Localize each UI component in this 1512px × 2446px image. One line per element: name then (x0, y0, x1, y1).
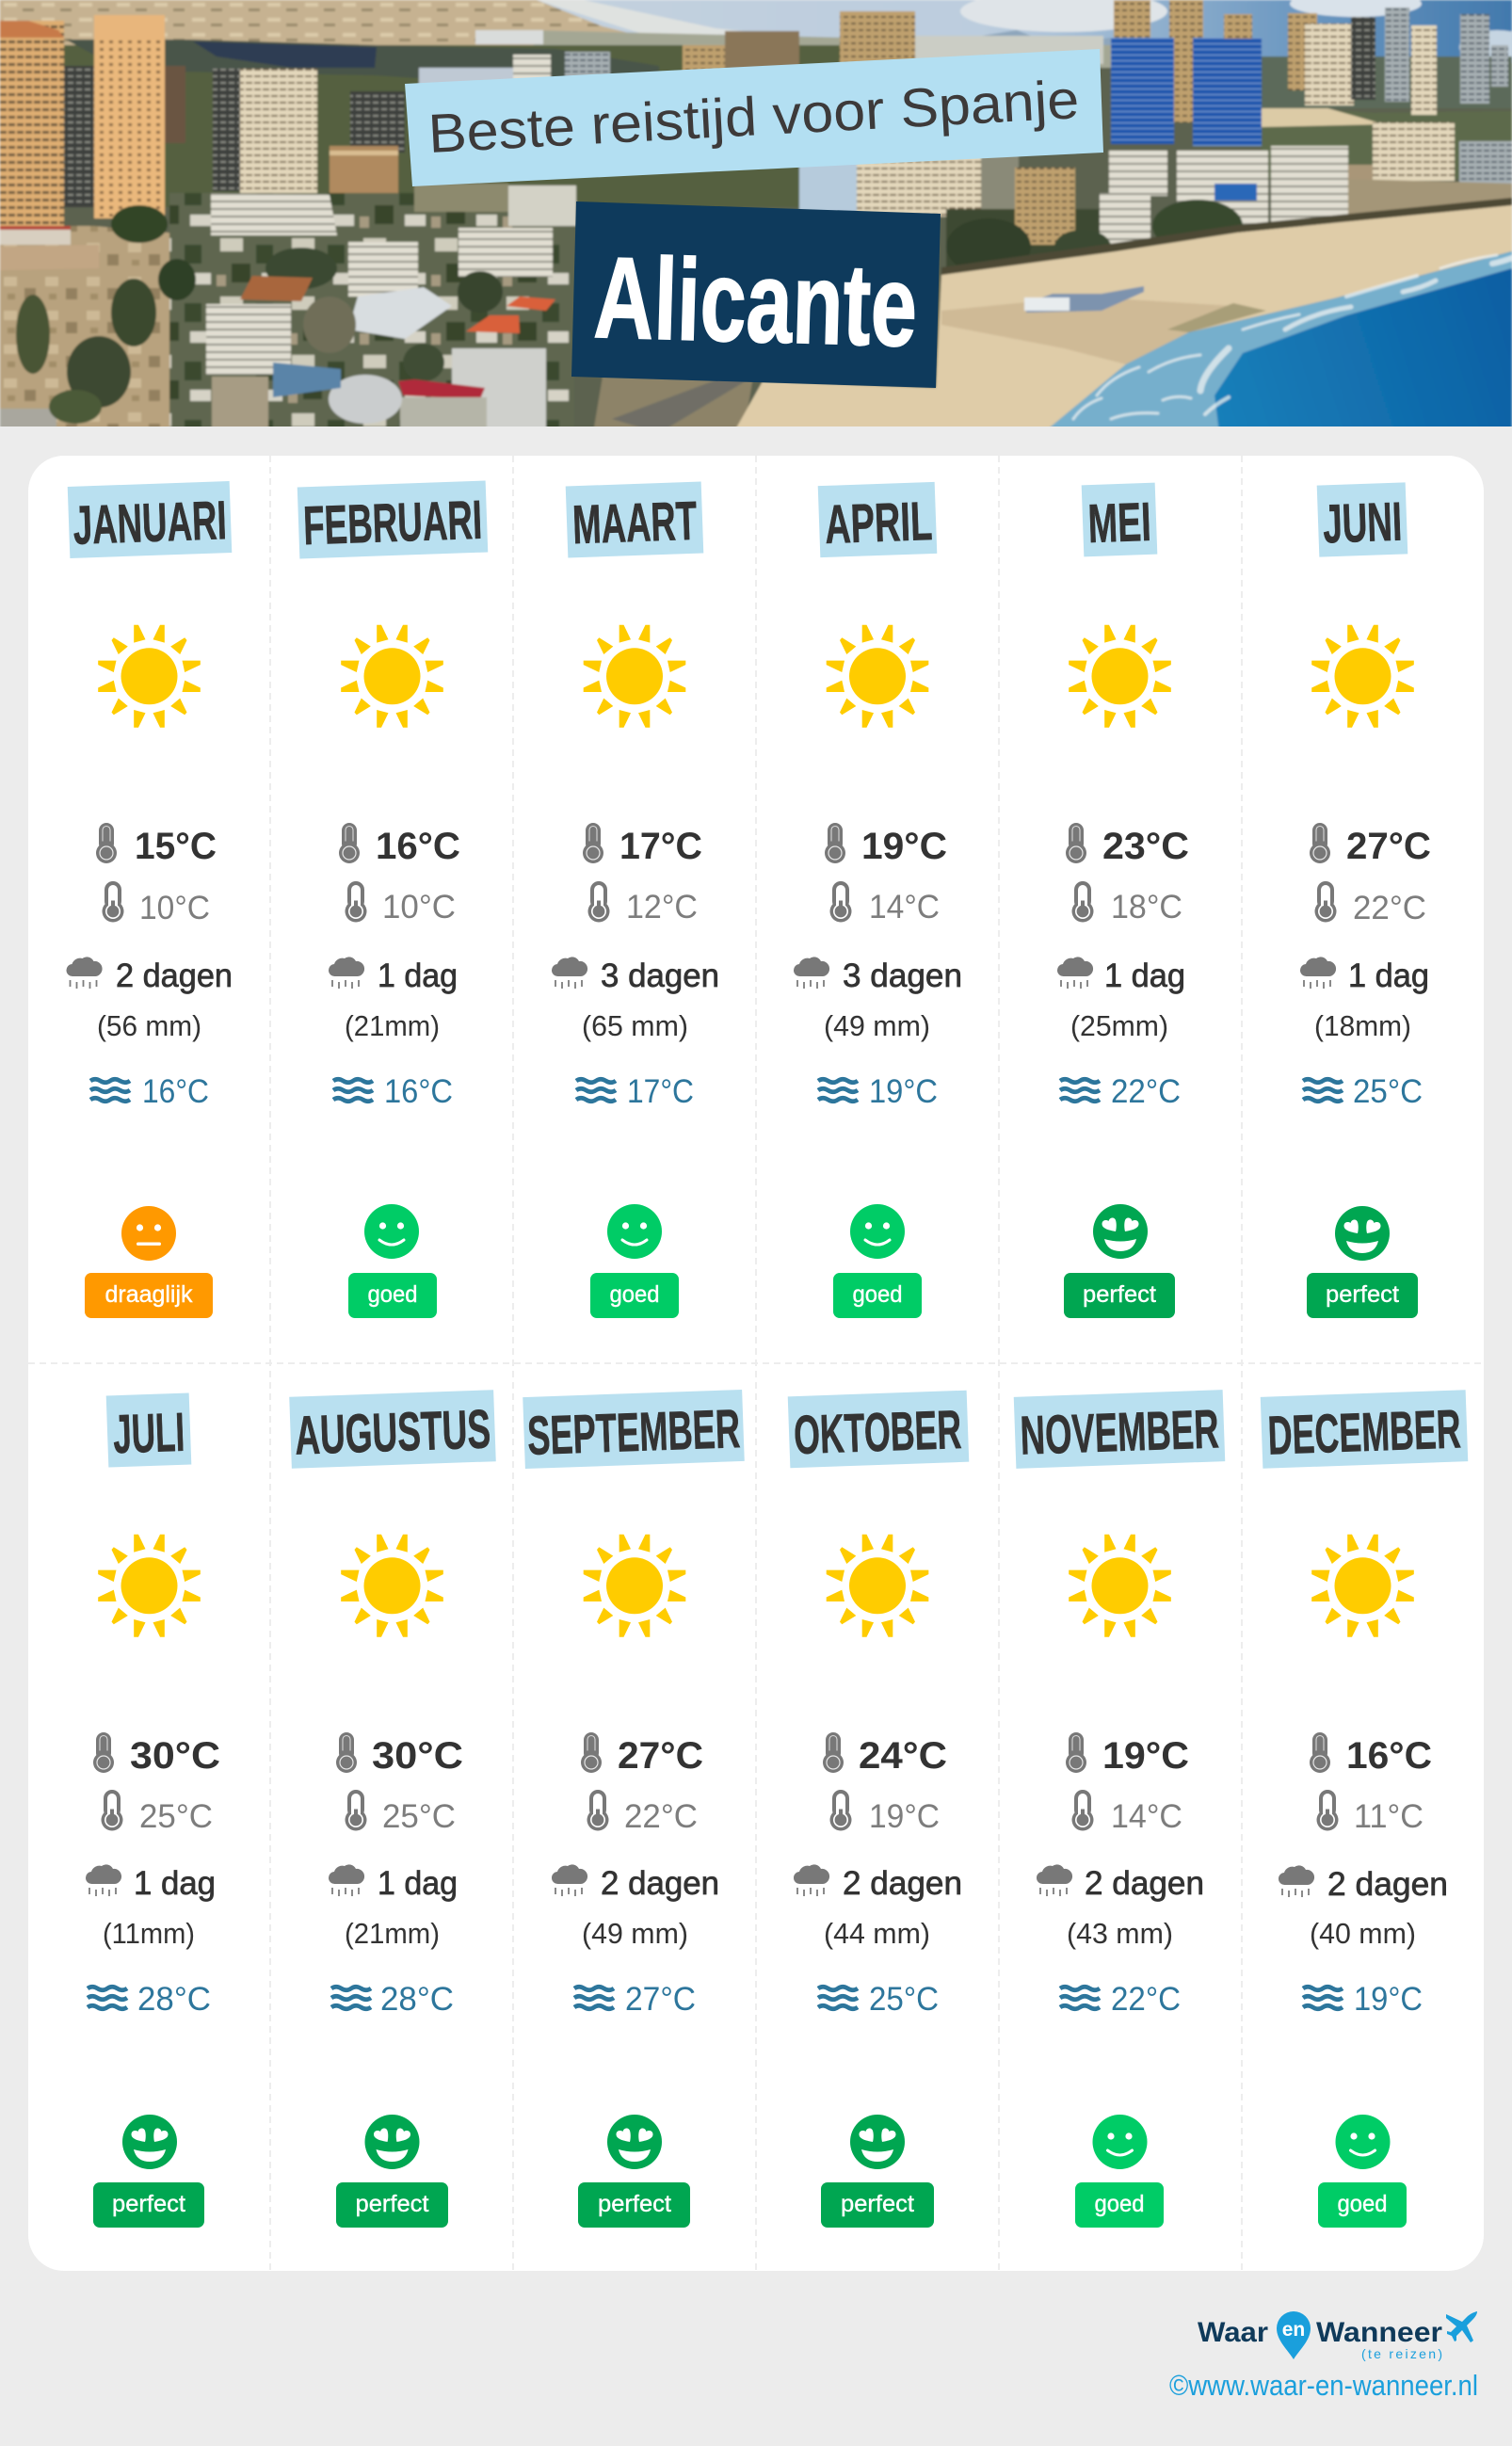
rating badge (85, 1273, 213, 1318)
icon: sun (827, 1535, 928, 1637)
icon: waves (1303, 1079, 1343, 1102)
icon: thermometer low (1314, 881, 1337, 923)
rainfall: (21mm) (345, 1009, 440, 1042)
icon: thermometer low (345, 881, 367, 923)
rating badge: goed (853, 1281, 902, 1308)
icon: thermometer high (583, 823, 603, 863)
icon: thermometer low (587, 881, 610, 923)
max temperature: 16°C (1346, 1735, 1432, 1777)
rating badge (590, 1273, 679, 1318)
icon: loving face (1335, 1206, 1390, 1261)
heading (788, 1391, 969, 1468)
month: september (523, 1390, 745, 2228)
rainfall: (49 mm) (824, 1009, 930, 1042)
month: augustus (289, 1390, 496, 2228)
month: mei (1057, 483, 1189, 1318)
heading: NOVEMBER (1020, 1398, 1220, 1467)
month: februari (298, 481, 488, 1318)
icon: sun (584, 625, 685, 728)
rainfall: (25mm) (1070, 1009, 1168, 1042)
max temperature: 27°C (618, 1735, 703, 1777)
heading: JANUARI (72, 490, 228, 556)
icon: waves (1060, 1079, 1100, 1102)
heading (566, 482, 703, 557)
title ribbon: Beste reistijd voor Spanje (426, 69, 1081, 165)
icon: waves (574, 1987, 614, 2009)
heading (289, 1390, 496, 1469)
heading: JULI (112, 1402, 185, 1465)
icon: smiling face (607, 1204, 662, 1259)
icon: sun (98, 1535, 201, 1637)
icon: sun (1069, 1535, 1171, 1637)
sea temperature: 16°C (384, 1073, 453, 1110)
min temperature: 12°C (626, 889, 698, 925)
icon: sun (98, 625, 201, 728)
icon: thermometer low (345, 1790, 367, 1830)
heading (68, 481, 232, 558)
rating badge: perfect (356, 2191, 429, 2217)
icon: loving face (365, 2115, 420, 2169)
month: juni (1300, 482, 1431, 1318)
heading: JUNI (1322, 491, 1403, 555)
max temperature: 15°C (135, 826, 217, 867)
icon: thermometer high (1066, 1732, 1086, 1773)
heading: FEBRUARI (302, 490, 483, 556)
max temperature: 27°C (1346, 826, 1431, 867)
icon: sun (827, 625, 928, 728)
icon: thermometer low (1316, 1790, 1339, 1830)
icon: thermometer high (1310, 1732, 1330, 1773)
icon: location pin (1277, 2311, 1311, 2359)
max temperature: 16°C (376, 826, 460, 867)
heading (1014, 1390, 1225, 1469)
icon: rain cloud (1300, 957, 1336, 989)
icon: loving face (1093, 1204, 1148, 1259)
min temperature: 25°C (139, 1798, 213, 1835)
heading: MEI (1087, 491, 1152, 555)
rating badge: perfect (598, 2191, 671, 2217)
rating badge: perfect (1326, 1281, 1399, 1308)
icon: waves (1060, 1987, 1100, 2009)
header photo: Alicante coastline (0, 0, 1512, 433)
min temperature: 22°C (624, 1798, 698, 1835)
icon: thermometer high (93, 1732, 114, 1773)
max temperature: 17°C (619, 826, 702, 867)
heading: APRIL (824, 491, 933, 555)
heading (1082, 483, 1157, 556)
rain days: 2 dagen (1327, 1866, 1448, 1903)
icon: loving face (850, 2115, 905, 2169)
rating badge: goed (367, 1281, 418, 1308)
icon: waves (1303, 1987, 1343, 2009)
sea temperature: 17°C (627, 1073, 694, 1110)
city name ribbon: Alicante (571, 201, 941, 388)
icon: waves (331, 1987, 371, 2009)
icon: waves (818, 1079, 858, 1102)
rainfall: (56 mm) (97, 1009, 201, 1042)
heading: AUGUSTUS (294, 1398, 491, 1467)
sea temperature: 28°C (137, 1981, 211, 2018)
min temperature: 11°C (1354, 1798, 1424, 1835)
icon: thermometer high (1310, 823, 1330, 863)
rating badge: perfect (1083, 1281, 1156, 1308)
icon: rain cloud (1057, 957, 1093, 989)
rating badge (1307, 1273, 1418, 1318)
icon: loving face (607, 2115, 662, 2169)
rating badge (821, 2182, 934, 2228)
icon: thermometer high (825, 823, 845, 863)
min temperature: 14°C (869, 889, 940, 925)
rain days: 2 dagen (116, 957, 233, 994)
rain days: 2 dagen (843, 1865, 962, 1902)
rainfall: (49 mm) (582, 1917, 688, 1950)
icon: rain cloud (86, 1864, 121, 1896)
rainfall: (40 mm) (1310, 1917, 1416, 1950)
icon: rain cloud (794, 957, 829, 989)
rating badge (1064, 1273, 1175, 1318)
heading (1317, 482, 1407, 557)
month: juli (86, 1392, 220, 2228)
heading (106, 1392, 191, 1468)
icon: rain cloud (1037, 1864, 1072, 1896)
rating badge: goed (1094, 2191, 1145, 2217)
sea temperature: 19°C (1354, 1981, 1423, 2018)
icon: thermometer low (1071, 881, 1094, 923)
icon: sun (584, 1535, 685, 1637)
sea temperature: 25°C (869, 1981, 939, 2018)
sea temperature: 28°C (380, 1981, 454, 2018)
icon: thermometer high (336, 1732, 357, 1773)
month: november (1014, 1390, 1225, 2228)
icon: thermometer high (581, 1732, 602, 1773)
rating badge: perfect (112, 2191, 185, 2217)
rain days: 1 dag (1104, 957, 1185, 994)
min temperature: 10°C (139, 890, 210, 926)
max temperature: 24°C (859, 1735, 947, 1777)
rain days: 3 dagen (601, 957, 719, 994)
heading: MAART (571, 491, 698, 555)
heading: SEPTEMBER (526, 1398, 741, 1467)
icon: rain cloud (552, 1864, 587, 1896)
icon: thermometer low (1071, 1790, 1094, 1830)
icon: sun (1311, 625, 1414, 728)
icon: rain cloud (794, 1864, 829, 1896)
icon: smiling face (850, 1204, 905, 1259)
sea temperature: 27°C (625, 1981, 696, 2018)
icon: waves (818, 1987, 858, 2009)
sea temperature: 16°C (142, 1073, 209, 1110)
icon: smiling face (364, 1204, 419, 1259)
rating badge (336, 2182, 448, 2228)
icon: rain cloud (329, 1864, 364, 1896)
sea temperature: 19°C (869, 1073, 938, 1110)
icon: waves (90, 1079, 130, 1102)
max temperature: 19°C (1102, 1735, 1189, 1777)
rating badge: goed (1337, 2191, 1388, 2217)
icon: smiling face (1092, 2115, 1147, 2169)
icon: thermometer high (96, 823, 117, 863)
city name ribbon: Alicante: Alicante (592, 233, 919, 372)
month: januari (66, 481, 233, 1318)
rain days: 3 dagen (843, 957, 962, 994)
website credit: ©www.waar-en-wanneer.nl (1169, 2369, 1478, 2402)
logo: Waar en Wanneer: Waar (1198, 2317, 1268, 2348)
icon: waves (576, 1079, 616, 1102)
rain days: 1 dag (1348, 957, 1429, 994)
title ribbon (405, 49, 1103, 186)
icon: thermometer high (339, 823, 360, 863)
icon: rain cloud (66, 957, 103, 989)
icon: sun (1069, 625, 1171, 728)
max temperature: 19°C (861, 826, 947, 867)
sea temperature: 22°C (1111, 1073, 1181, 1110)
rating badge (1318, 2182, 1407, 2228)
rating badge: goed (610, 1281, 659, 1308)
rain days: 2 dagen (1085, 1865, 1204, 1902)
rating badge: perfect (841, 2191, 914, 2217)
icon: location pin: en (1282, 2319, 1305, 2341)
rainfall: (43 mm) (1067, 1917, 1173, 1950)
rating badge (1075, 2182, 1164, 2228)
logo: Waar en Wanneer (1198, 2311, 1477, 2361)
icon: thermometer low (587, 1790, 608, 1830)
rating badge (578, 2182, 690, 2228)
rain days: 1 dag (378, 1865, 458, 1902)
min temperature: 14°C (1111, 1798, 1182, 1835)
icon: thermometer low (830, 1790, 851, 1830)
heading (298, 481, 488, 558)
icon: loving face (122, 2115, 177, 2169)
icon: sun (341, 625, 443, 728)
month: oktober (788, 1391, 969, 2228)
min temperature: 10°C (382, 889, 456, 925)
max temperature: 23°C (1102, 826, 1189, 867)
rainfall: (11mm) (103, 1917, 195, 1950)
min temperature: 19°C (869, 1798, 940, 1835)
rain days: 1 dag (378, 957, 458, 994)
min temperature: 18°C (1111, 889, 1182, 925)
rating badge (93, 2182, 204, 2228)
icon: thermometer high (1066, 823, 1086, 863)
rainfall: (65 mm) (582, 1009, 688, 1042)
icon: thermometer high (823, 1732, 844, 1773)
sea temperature: 22°C (1111, 1981, 1181, 2018)
rating badge: draaglijk (105, 1281, 193, 1308)
icon: airplane (1446, 2311, 1477, 2342)
panel: month grid (28, 456, 1484, 2271)
month: april (794, 482, 962, 1318)
heading (523, 1390, 745, 1469)
rainfall: (44 mm) (824, 1917, 930, 1950)
rating badge (348, 1273, 437, 1318)
icon: sun (341, 1535, 443, 1637)
logo: Waar en Wanneer: Wanneer (1316, 2317, 1442, 2348)
rainfall: (18mm) (1314, 1009, 1411, 1042)
rainfall: (21mm) (345, 1917, 440, 1950)
icon: rain cloud (329, 957, 364, 989)
icon: rain cloud (552, 957, 587, 989)
sea temperature: 25°C (1353, 1073, 1423, 1110)
icon: thermometer low (102, 881, 124, 923)
icon: sun (1311, 1535, 1414, 1637)
month: december (1261, 1390, 1468, 2228)
min temperature: 22°C (1353, 890, 1426, 926)
icon: smiling face (1335, 2115, 1390, 2169)
month: maart (552, 482, 719, 1318)
heading: OKTOBER (793, 1399, 962, 1466)
rain days: 2 dagen (601, 1865, 719, 1902)
rating badge (833, 1273, 922, 1318)
heading (818, 482, 937, 557)
max temperature: 30°C (130, 1735, 220, 1777)
min temperature: 25°C (382, 1798, 456, 1835)
logo: Waar en Wanneer: (te reizen) (1361, 2346, 1442, 2361)
icon: thermometer low (830, 881, 851, 923)
max temperature: 30°C (372, 1735, 463, 1777)
icon: neutral face (121, 1206, 176, 1261)
rain days: 1 dag (134, 1865, 216, 1902)
icon: waves (333, 1079, 373, 1102)
icon: rain cloud (1279, 1865, 1314, 1897)
icon: thermometer low (102, 1790, 122, 1830)
icon: waves (88, 1987, 127, 2009)
